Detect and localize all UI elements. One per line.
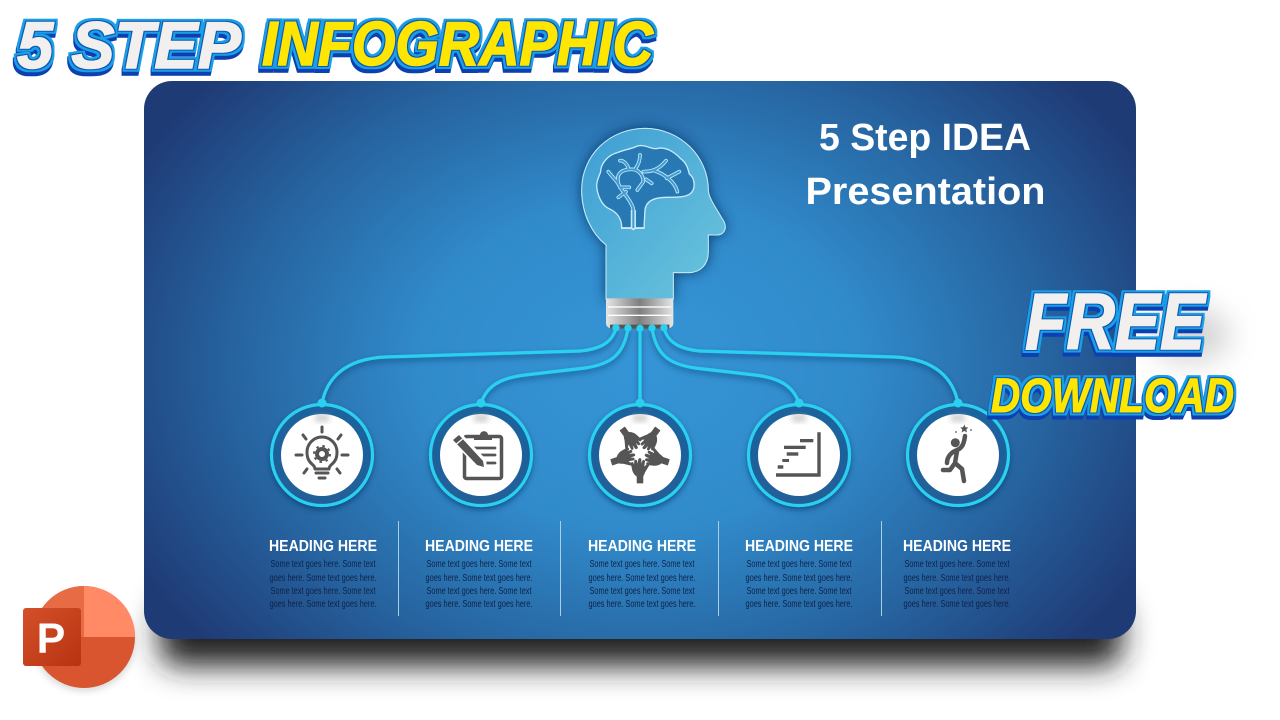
column 5 text: goes here. Some text goes here. <box>904 598 1010 610</box>
column 5 text: goes here. Some text goes here. <box>904 572 1010 584</box>
column 3 text <box>588 538 696 610</box>
column 4 text: Some text goes here. Some text <box>746 585 852 597</box>
step 1 circle: idea bulb <box>271 398 373 506</box>
column 2 text <box>425 538 533 610</box>
column 4 text <box>745 538 853 610</box>
icon: powerpoint logo <box>23 586 136 692</box>
column 4 text: Some text goes here. Some text <box>746 558 852 570</box>
column 2 text: Some text goes here. Some text <box>426 558 532 570</box>
head silhouette <box>582 128 725 299</box>
connector lines from bulb to steps <box>322 328 958 403</box>
step 3 circle: hands <box>589 398 691 506</box>
column 2 text: HEADING HERE <box>425 538 533 555</box>
metal bulb base <box>606 298 673 329</box>
column 1 text: HEADING HERE <box>269 538 377 555</box>
column 3 text: Some text goes here. Some text <box>590 558 695 570</box>
main banner title: infographic: INFOGRAPHIC <box>262 10 654 79</box>
column 2 text: goes here. Some text goes here. <box>426 572 532 584</box>
slide title: 5 Step IDEA <box>819 117 1031 159</box>
column 1 text <box>269 538 377 610</box>
free label: FREE <box>1025 277 1207 366</box>
column 1 text: Some text goes here. Some text <box>270 558 376 570</box>
panel shadow <box>160 600 1122 666</box>
slide title: Presentation <box>806 171 1046 213</box>
column 1 text: goes here. Some text goes here. <box>270 598 376 610</box>
column 1 text: goes here. Some text goes here. <box>270 572 376 584</box>
column 1 text: Some text goes here. Some text <box>270 585 376 597</box>
column 4 text: goes here. Some text goes here. <box>746 572 852 584</box>
head and bulb illustration <box>582 128 725 332</box>
column 4 text: HEADING HERE <box>745 538 853 555</box>
download label: DOWNLOAD <box>991 370 1234 423</box>
column 2 text: goes here. Some text goes here. <box>426 598 532 610</box>
column 2 text: Some text goes here. Some text <box>426 585 532 597</box>
column 3 text: goes here. Some text goes here. <box>588 598 696 610</box>
main banner title: 5 step: 5 STEP <box>17 8 242 82</box>
column 3 text: Some text goes here. Some text <box>590 585 695 597</box>
step 4 circle: stairs <box>748 398 850 506</box>
slide title <box>806 117 1046 213</box>
column 5 text: Some text goes here. Some text <box>904 558 1010 570</box>
column 4 text: goes here. Some text goes here. <box>746 598 852 610</box>
step 2 circle: clipboard <box>430 398 532 506</box>
connector dots <box>612 324 668 332</box>
column 5 text: Some text goes here. Some text <box>904 585 1010 597</box>
brain <box>597 146 694 228</box>
step 5 circle: reaching figure <box>907 398 1009 506</box>
column 3 text: goes here. Some text goes here. <box>588 572 696 584</box>
icon: powerpoint logo: P <box>37 615 65 663</box>
column 3 text: HEADING HERE <box>588 538 696 555</box>
column 5 text <box>903 538 1011 610</box>
column 5 text: HEADING HERE <box>903 538 1011 555</box>
soft shadow behind free label <box>1150 307 1230 363</box>
main blue panel <box>144 81 1136 639</box>
